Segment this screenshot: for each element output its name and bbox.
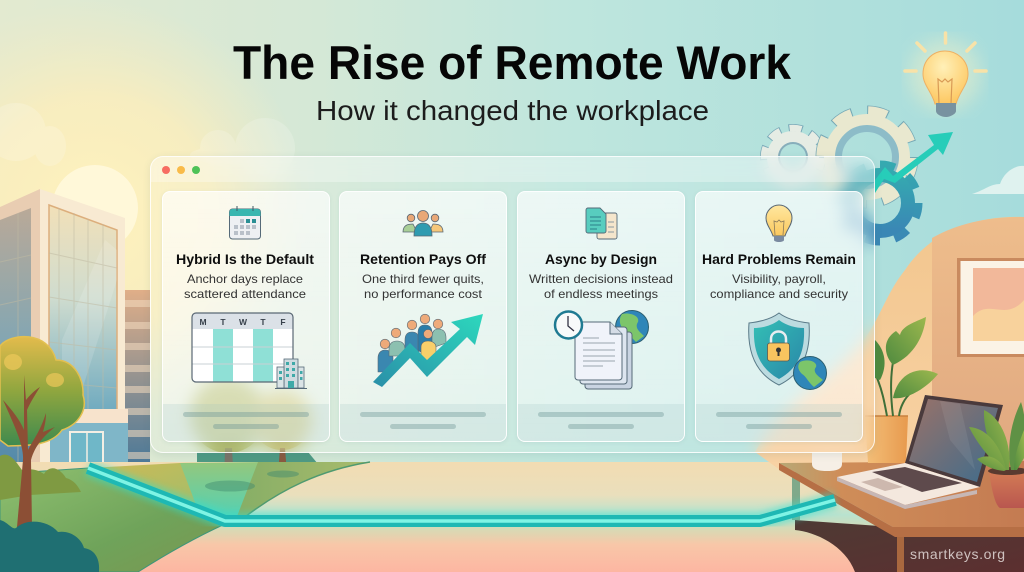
small gear <box>764 128 822 186</box>
weekly attendance grid: W <box>239 317 248 327</box>
floor plant <box>865 317 938 463</box>
right cloud <box>972 166 1024 194</box>
weekly attendance grid: T <box>260 317 266 327</box>
weekly attendance grid: T <box>220 317 226 327</box>
weekly attendance grid <box>192 313 293 382</box>
card description <box>710 272 848 301</box>
teal gear <box>842 165 918 241</box>
card 1 content <box>176 206 314 388</box>
card 2 <box>339 191 507 442</box>
desk legs <box>792 472 904 572</box>
window panel <box>150 156 875 453</box>
tree <box>0 337 84 527</box>
desk underside <box>795 520 1024 572</box>
light bulb with rays <box>905 33 986 117</box>
card 4 content <box>702 205 856 390</box>
icon: padlock <box>768 332 790 361</box>
weekly attendance grid: M <box>199 317 207 327</box>
lawn below path <box>0 468 225 572</box>
chart: people and rising arrow <box>373 314 483 387</box>
icon: team <box>403 210 443 236</box>
window title bar <box>151 157 874 182</box>
coffee cup <box>812 452 842 471</box>
blurred tree canopies behind panel <box>190 377 312 453</box>
laptop <box>837 395 1003 509</box>
icon: calendar <box>230 206 260 239</box>
desk <box>779 461 1024 527</box>
lawn wedge: right <box>236 462 370 519</box>
distant tree shadows <box>205 470 299 492</box>
far hedge and distant trees <box>197 448 318 486</box>
wall picture <box>957 258 1024 357</box>
large gear <box>821 111 913 203</box>
watermark: smartkeys.org <box>910 546 1005 562</box>
icon: small light bulb <box>766 205 792 242</box>
icon: globe <box>794 356 826 390</box>
card description <box>184 272 306 301</box>
card heading: Async by Design <box>545 251 657 267</box>
card heading: Hard Problems Remain <box>702 251 856 267</box>
card 3 <box>517 191 685 442</box>
desk plant <box>969 402 1024 508</box>
card 4 <box>695 191 863 442</box>
lawn wedge: centre <box>180 462 260 521</box>
green lawn <box>0 462 370 572</box>
icon: shield <box>749 313 809 385</box>
peach floor <box>0 462 900 572</box>
card description: Visibility, payroll, <box>732 272 826 286</box>
card description: One third fewer quits, <box>362 272 484 286</box>
icon: documents <box>586 208 617 239</box>
card 1 <box>162 191 330 442</box>
wall <box>755 217 1024 470</box>
card 2 content <box>360 210 486 387</box>
left bushes <box>0 455 81 500</box>
card description: Anchor days replace <box>187 272 303 286</box>
card description: no performance cost <box>364 287 483 301</box>
icon: office building <box>275 359 307 388</box>
card description: scattered attendance <box>184 287 306 301</box>
card heading: Hybrid Is the Default <box>176 251 314 267</box>
icon: clock <box>555 312 582 338</box>
glowing path line <box>88 468 835 521</box>
icon: document stack <box>575 322 632 389</box>
card description <box>362 272 484 301</box>
weekly attendance grid: F <box>280 317 286 327</box>
lawn wedge: gold <box>88 463 207 510</box>
office building <box>0 189 150 475</box>
dark foreground bush <box>0 520 99 572</box>
icon: globe <box>616 310 648 344</box>
sun glow <box>0 0 330 440</box>
card heading: Retention Pays Off <box>360 251 486 267</box>
card description: of endless meetings <box>544 287 658 301</box>
card description <box>529 272 673 301</box>
sun disc <box>52 165 138 251</box>
card description: compliance and security <box>710 287 848 301</box>
title: The Rise of Remote Work <box>233 36 792 89</box>
card description: Written decisions instead <box>529 272 673 286</box>
card 3 content <box>529 208 673 389</box>
subtitle: How it changed the workplace <box>316 95 709 126</box>
rising arrow <box>875 132 953 193</box>
left clouds <box>0 103 295 178</box>
